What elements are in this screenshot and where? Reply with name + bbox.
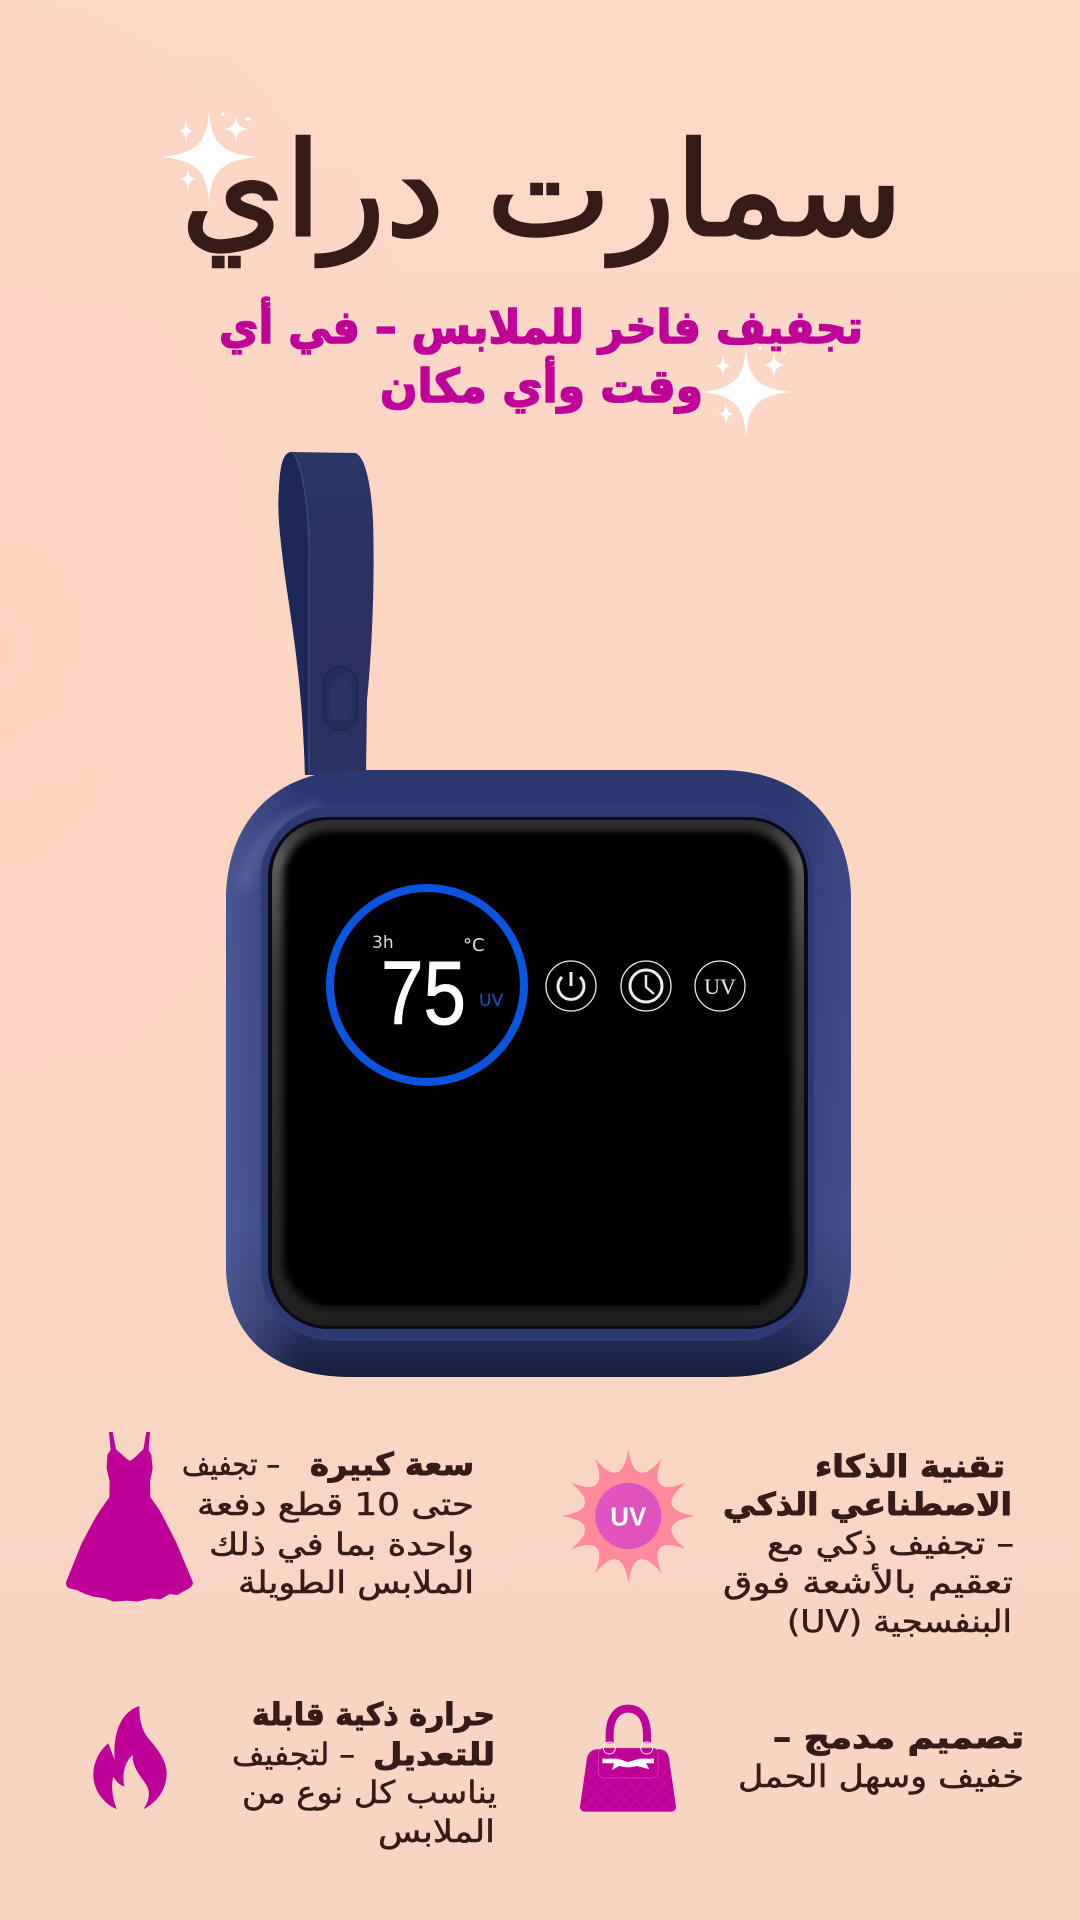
- screen: [268, 817, 808, 1329]
- label: 3h: 3h: [372, 933, 394, 953]
- subtitle: [219, 297, 863, 413]
- label: degrees: °C: [463, 935, 485, 956]
- icon: UV sun: UV: [610, 1502, 647, 1532]
- text: adjustable heat: – لتجفيف: [232, 1737, 355, 1773]
- button: UV: UV: [704, 974, 736, 999]
- feature: large capacity: [66, 1432, 474, 1602]
- icon: flame: [93, 1706, 167, 1809]
- text: large capacity: سعة كبيرة: [310, 1447, 474, 1483]
- title: سمارت دراي: [181, 114, 903, 267]
- text: compact design: خفيف وسهل الحمل: [738, 1759, 1024, 1795]
- text: adjustable heat: حرارة ذكية قابلة: [252, 1697, 495, 1733]
- text: compact design: تصميم مدمج –: [773, 1720, 1024, 1756]
- text: compact design: [738, 1720, 1024, 1795]
- text: large capacity: الملابس الطويلة: [238, 1565, 474, 1601]
- subtitle: تجفيف فاخر للملابس – في أي: [219, 297, 863, 354]
- text: AI UV technology: تعقيم بالأشعة فوق: [723, 1563, 1013, 1601]
- product: portable dryer: [226, 452, 851, 1377]
- subtitle: وقت وأي مكان: [380, 356, 703, 413]
- button: timer: [621, 961, 671, 1011]
- button: UV: [695, 961, 745, 1011]
- button: power: [546, 961, 596, 1011]
- icon: handbag: [580, 1709, 676, 1812]
- text: adjustable heat: [232, 1697, 497, 1850]
- sparkles: subtitle: [701, 344, 791, 438]
- text: adjustable heat: للتعديل: [373, 1737, 495, 1773]
- device body: [226, 770, 851, 1377]
- feature: adjustable heat: [93, 1697, 497, 1850]
- text: AI UV technology: – تجفيف ذكي مع: [767, 1526, 1014, 1562]
- text: AI UV technology: [723, 1449, 1014, 1640]
- text: adjustable heat: الملابس: [378, 1814, 495, 1850]
- text: large capacity: واحدة بما في ذلك: [209, 1527, 474, 1563]
- feature: compact design: [580, 1709, 1024, 1812]
- text: large capacity: [182, 1447, 474, 1601]
- strap: [278, 452, 374, 775]
- text: large capacity: – تجفيف: [182, 1447, 280, 1483]
- temperature value: 75: [381, 944, 466, 1044]
- temperature ring: [330, 888, 524, 1082]
- text: adjustable heat: يناسب كل نوع من: [242, 1775, 497, 1811]
- text: AI UV technology: الاصطناعي الذكي: [723, 1487, 1012, 1523]
- text: AI UV technology: تقنية الذكاء: [815, 1449, 1005, 1485]
- sparkles: title: [161, 110, 257, 204]
- text: large capacity: حتى 10 قطع دفعة: [197, 1487, 474, 1523]
- text: AI UV technology: البنفسجية (UV): [787, 1604, 1012, 1640]
- icon: dress: [66, 1432, 193, 1602]
- icon: UV sun: [562, 1449, 695, 1583]
- label: UV mode: UV: [479, 991, 503, 1011]
- feature: AI UV technology: [562, 1449, 1014, 1640]
